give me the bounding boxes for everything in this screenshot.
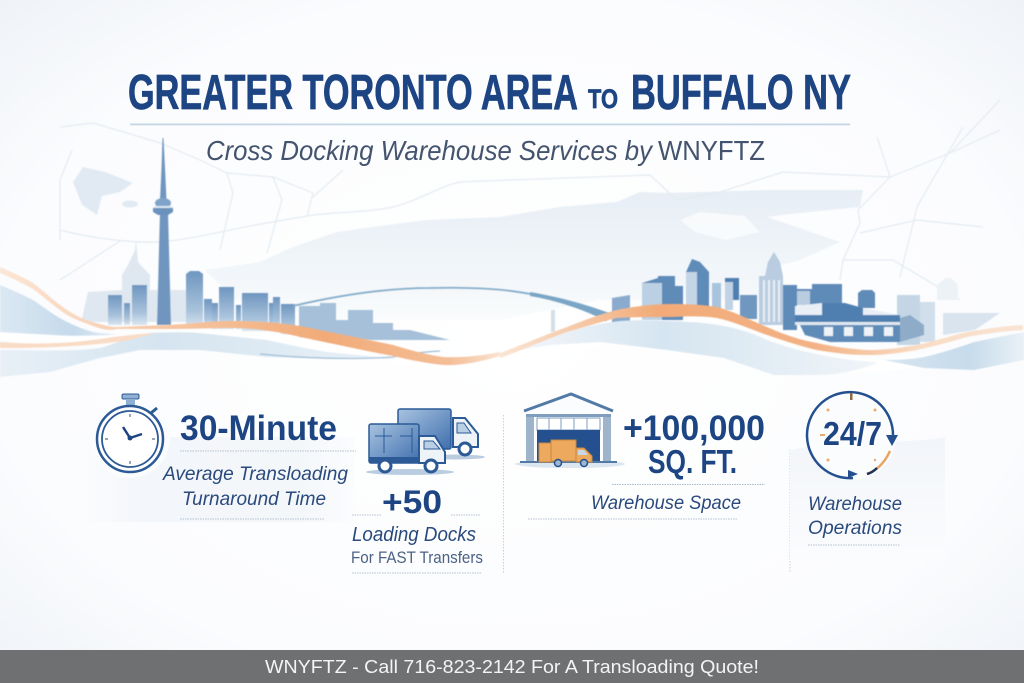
title: TO bbox=[588, 84, 618, 114]
warehouse building bbox=[795, 303, 900, 323]
icon: stopwatch bbox=[90, 394, 170, 478]
faded buildings bbox=[937, 278, 958, 300]
footer bar bbox=[0, 650, 1024, 683]
middle blue band bbox=[520, 320, 877, 375]
title rule bbox=[130, 124, 850, 125]
white stripe under skyline bbox=[0, 322, 1024, 372]
icon: warehouse bbox=[515, 394, 625, 468]
description: Turnaround Time bbox=[182, 489, 326, 510]
stat: +50 bbox=[382, 484, 442, 520]
left blue wave bbox=[0, 285, 123, 337]
faded domed building bbox=[82, 240, 190, 322]
heading: 30-Minute bbox=[180, 409, 337, 448]
subtitle: WNYFTZ bbox=[658, 135, 765, 166]
label: Warehouse bbox=[808, 494, 902, 515]
orange ribbon left bbox=[0, 267, 500, 365]
orange ribbon right bbox=[500, 304, 1023, 358]
label: Loading Docks bbox=[352, 524, 476, 546]
panel: 30-minute turnaround bbox=[80, 394, 356, 522]
office blocks bbox=[612, 295, 630, 325]
sub-label: For FAST Transfers bbox=[351, 548, 483, 567]
icon: 24/7 clock bbox=[807, 392, 898, 480]
panel shading bbox=[790, 437, 945, 560]
stat: SQ. FT. bbox=[648, 443, 737, 480]
bridge bbox=[293, 288, 612, 332]
title: BUFFALO NY bbox=[631, 66, 851, 120]
small lake bbox=[73, 167, 133, 215]
waves bbox=[0, 267, 1024, 377]
panel shading bbox=[80, 437, 355, 522]
tall tower bbox=[686, 259, 709, 310]
thin orange left stripe bbox=[0, 333, 155, 348]
background map bbox=[60, 100, 1000, 320]
title: GREATER TORONTO AREA bbox=[128, 66, 578, 120]
description bbox=[162, 464, 348, 510]
label: Operations bbox=[808, 518, 902, 539]
panel: 24/7 operations bbox=[790, 392, 945, 560]
panel: loading docks bbox=[351, 409, 485, 573]
icon: CN Tower bbox=[153, 138, 173, 325]
footer bar: WNYFTZ - Call 716-823-2142 For A Transloading Quote! bbox=[265, 656, 759, 677]
lake bbox=[205, 190, 863, 320]
Buffalo skyline bbox=[612, 252, 1000, 345]
right blue band bbox=[884, 332, 1024, 370]
description: Average Transloading bbox=[162, 464, 348, 485]
buildings bbox=[108, 271, 295, 334]
stat: +100,000 bbox=[623, 409, 765, 448]
blue line bbox=[260, 351, 440, 358]
stat bbox=[623, 409, 765, 480]
art deco tower bbox=[759, 252, 783, 325]
Toronto skyline bbox=[82, 138, 450, 340]
roads bbox=[60, 100, 1000, 300]
icon: 24/7 clock: 24/7 bbox=[823, 415, 882, 452]
label bbox=[808, 494, 902, 539]
label: Warehouse Space bbox=[591, 493, 741, 514]
lower-left blue band bbox=[0, 332, 400, 377]
subtitle: Cross Docking Warehouse Services by bbox=[206, 135, 654, 166]
panel: warehouse space bbox=[515, 394, 765, 519]
icon: trucks bbox=[366, 409, 485, 475]
